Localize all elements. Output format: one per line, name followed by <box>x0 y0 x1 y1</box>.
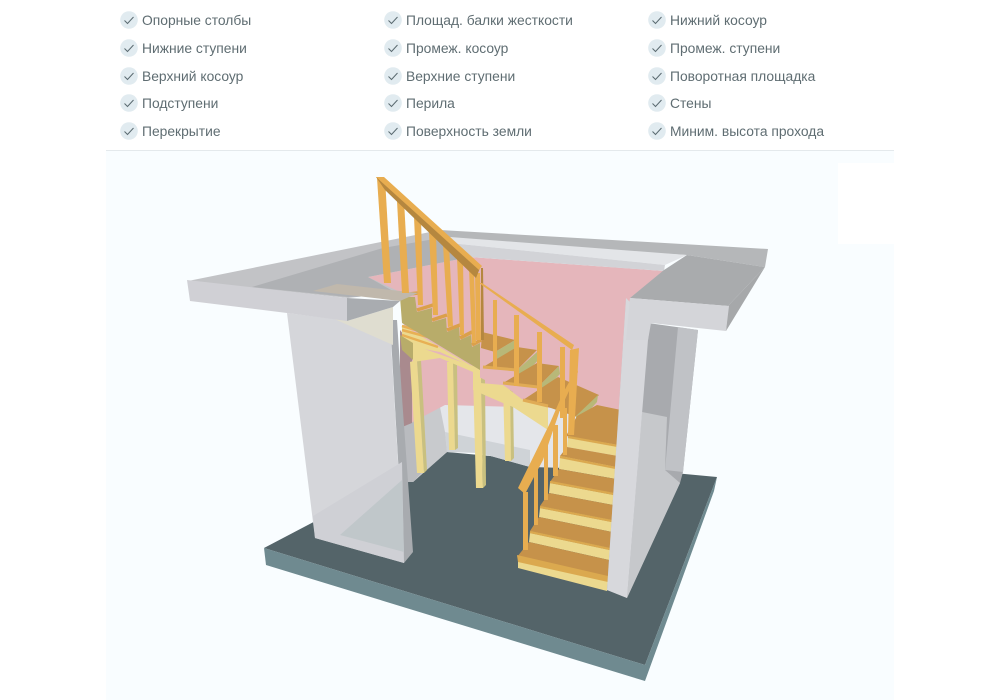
item: Перекрытие <box>142 123 221 139</box>
item <box>120 122 221 140</box>
divider <box>106 150 894 151</box>
item: Верхние ступени <box>406 68 515 84</box>
railings <box>376 177 579 550</box>
left wall <box>287 313 413 563</box>
upper stringer and treads <box>400 293 481 370</box>
item: Промеж. ступени <box>670 40 780 56</box>
item: Верхний косоур <box>142 68 243 84</box>
item: Перила <box>406 95 455 111</box>
middle treads <box>481 332 599 424</box>
right wall <box>607 298 729 598</box>
item: Опорные столбы <box>142 12 251 28</box>
item: Подступени <box>142 95 218 111</box>
posts <box>410 360 514 488</box>
item: Поверхность земли <box>406 123 532 139</box>
item <box>120 94 218 112</box>
item: Стены <box>670 95 711 111</box>
white patch <box>838 163 894 244</box>
item: Промеж. косоур <box>406 40 508 56</box>
item: Миним. высота прохода <box>670 123 824 139</box>
item <box>648 94 711 112</box>
item: Площад. балки жесткости <box>406 12 573 28</box>
item: Поворотная площадка <box>670 68 815 84</box>
opening faces and right ceiling slab <box>440 230 768 331</box>
lower flight of steps <box>517 405 621 591</box>
back walls <box>368 257 664 482</box>
item <box>384 94 455 112</box>
item: Нижний косоур <box>670 12 767 28</box>
drawing panel background <box>106 151 894 700</box>
item: Нижние ступени <box>142 40 247 56</box>
left ceiling slab <box>187 230 470 345</box>
ground slab <box>264 452 717 681</box>
middle stringer <box>413 345 548 430</box>
checklist legend <box>120 11 824 140</box>
